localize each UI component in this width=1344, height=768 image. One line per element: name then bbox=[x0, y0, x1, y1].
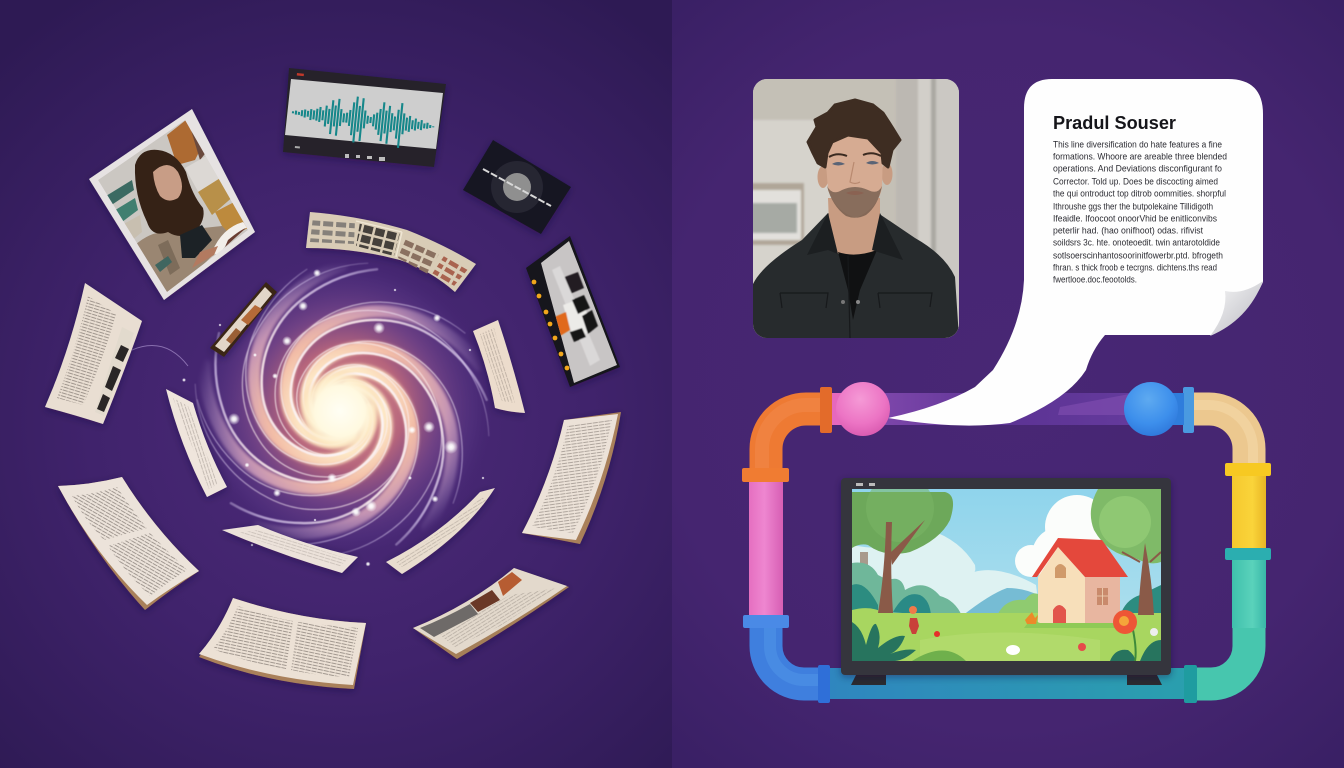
pipe: tan elbow bbox=[1190, 409, 1249, 466]
bubble body text: the qui ontroduct top ditrob oommities. shorpful bbox=[1053, 188, 1226, 200]
bubble body text: Ithroushe ggs ther the butpolekaine Tillidigoth bbox=[1053, 202, 1213, 212]
bubble body text: This line diversification do hate features a fine bbox=[1053, 140, 1222, 150]
collar: yellow bbox=[1225, 463, 1271, 476]
pipe: blue elbow bbox=[766, 626, 822, 684]
bubble body bbox=[888, 79, 1263, 426]
media player: audio waveform bbox=[283, 68, 446, 167]
collar: blue left bbox=[743, 615, 789, 628]
paper fold bbox=[1210, 281, 1263, 336]
pipe: yellow vertical bbox=[1232, 474, 1266, 550]
bubble body text bbox=[1053, 140, 1227, 286]
bubble body text: Corrector. Told up. Does be discocting aimed bbox=[1053, 176, 1218, 188]
pipe: purple highlight bbox=[1058, 393, 1135, 415]
paper: bottom open book bbox=[199, 598, 366, 689]
speech bubble with paper fold bbox=[888, 79, 1263, 426]
panel: right pipeline background bbox=[672, 0, 1344, 768]
paper: lower-left open book bbox=[58, 477, 199, 610]
pipe: bottom bbox=[828, 668, 1186, 699]
monitor feet bbox=[851, 675, 1162, 685]
collar: teal bottom bbox=[1184, 665, 1197, 703]
sparkles bbox=[182, 269, 484, 566]
pipe: orange highlight bbox=[762, 405, 824, 468]
paper: bottom inner strip bbox=[222, 525, 358, 573]
monitor frame bbox=[841, 478, 1171, 675]
media player: dark disc video bbox=[463, 140, 571, 234]
landscape scene bbox=[852, 474, 1161, 661]
paper: right inner strip bbox=[473, 320, 525, 413]
pipe: tan highlight bbox=[1192, 405, 1253, 464]
pipe: blue highlight bbox=[770, 628, 820, 680]
bubble body text: fwertlooe.doc.feootolds. bbox=[1053, 274, 1137, 286]
waveform trace bbox=[288, 90, 435, 151]
paper: top-centre magazine spread bbox=[306, 212, 476, 292]
bubble body text: peterlir had. (hao onifhoot) odas. rifivist bbox=[1053, 226, 1203, 236]
pipe: orange elbow bbox=[766, 409, 824, 470]
panel: left spiral background bbox=[0, 0, 672, 768]
pipe frame bbox=[742, 387, 1271, 703]
ball valve: blue bbox=[1124, 382, 1178, 436]
connector: pink stub bbox=[832, 393, 846, 425]
window buttons bbox=[856, 483, 875, 486]
film strip: right frame bbox=[526, 236, 620, 387]
bubble body text: sotlsoerscinhantosoorinitfowerbr.ptd. bfrogeth bbox=[1053, 250, 1223, 262]
galaxy spiral bbox=[167, 235, 517, 585]
faint orbit line bbox=[132, 346, 188, 366]
pipe: teal elbow bbox=[1195, 600, 1249, 684]
collar: teal right bbox=[1225, 548, 1271, 560]
photo: woman reading bbox=[89, 109, 255, 300]
paper: right open book bbox=[522, 412, 621, 544]
monitor with landscape bbox=[841, 474, 1171, 685]
paper: left inner strip bbox=[166, 389, 227, 497]
collar: orange lower bbox=[742, 468, 789, 482]
collar: orange top bbox=[820, 387, 832, 433]
collar: blue bottom bbox=[818, 665, 830, 703]
paper: top-left magazine page bbox=[45, 283, 142, 424]
bubble body text: fhran. s thick froob e tecrgns. dichtens.ths read bbox=[1053, 262, 1217, 274]
pipe: top purple bbox=[885, 393, 1130, 425]
photo: man portrait bbox=[753, 79, 959, 338]
paper: lower right inner strip bbox=[386, 488, 495, 574]
film strip: small bbox=[210, 282, 277, 357]
bubble body text: Ifeaidle. Ifoocoot onoorVhid be enitliconvibs bbox=[1053, 214, 1217, 224]
bubble heading: Pradul Souser bbox=[1053, 113, 1176, 133]
bubble body text: soildsrs 3c. hte. onoteoedit. twin antarotoldide bbox=[1053, 238, 1220, 248]
collar: blue top right bbox=[1183, 387, 1194, 433]
ball valve: pink bbox=[836, 382, 890, 436]
connector: blue stub bbox=[1170, 393, 1184, 425]
paper: bottom-right magazine bbox=[413, 568, 569, 659]
bubble body text: formations. Whoore are areable three blended bbox=[1053, 152, 1227, 162]
pipe: pink vertical bbox=[749, 480, 783, 617]
pipe: teal vertical bbox=[1232, 558, 1266, 628]
bubble body text: operations. And Deviations disconfigurant fo bbox=[1053, 164, 1222, 174]
